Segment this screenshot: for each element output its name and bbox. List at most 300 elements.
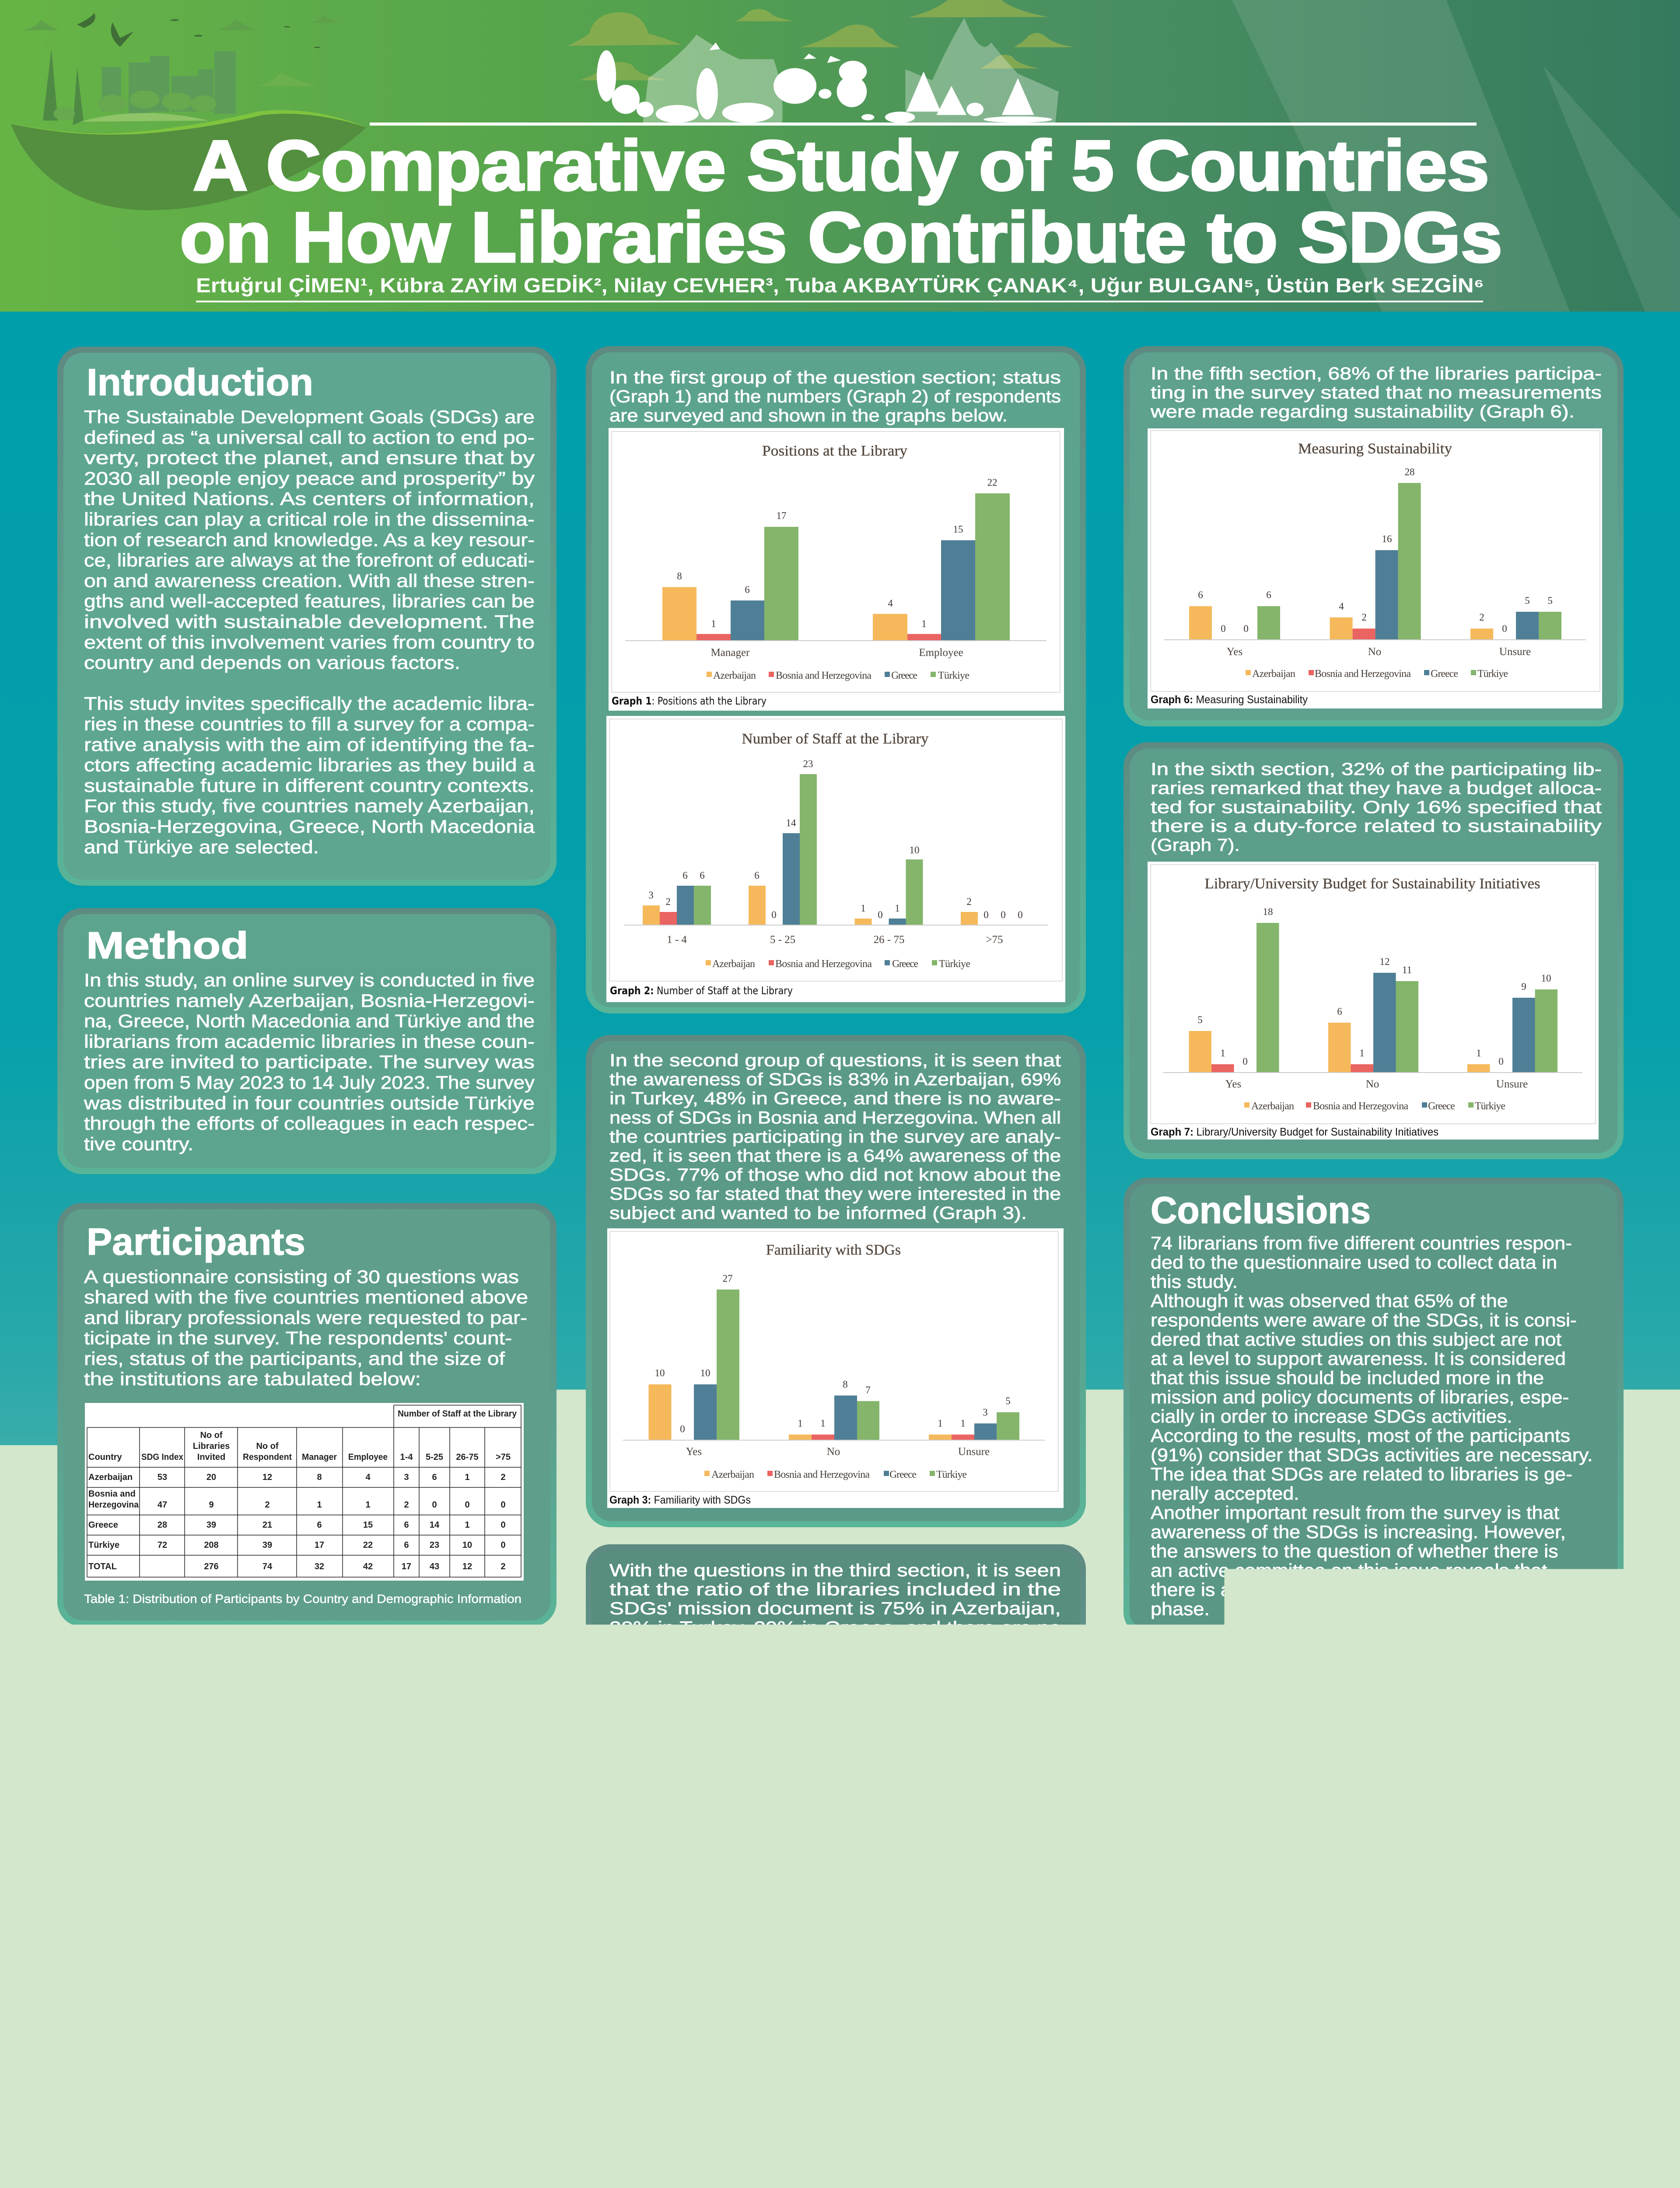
text: acknowledgement body: from Greece, Elchin Mamadov from Azerbaijan, bbox=[1151, 2086, 1568, 2107]
value labels 2 bbox=[648, 758, 1023, 920]
header band bbox=[0, 0, 1680, 312]
title: on How Libraries Contribute to SDGs bbox=[180, 198, 1502, 277]
text: method body: na, Greece, North Macedonia and Türkiye and the bbox=[84, 1011, 535, 1031]
text: limitations body bbox=[84, 1712, 535, 1999]
table 1: >75 bbox=[496, 1452, 511, 1462]
text: limitations body: The acceptance of the fact that academic libraries bbox=[84, 1712, 535, 1732]
table 1: 39 bbox=[206, 1520, 216, 1530]
value labels 4: 9 bbox=[844, 1897, 849, 1908]
categories 7: No bbox=[1366, 1078, 1379, 1090]
text: fifth section: In the fifth section, 68% of the libraries participa- bbox=[1151, 364, 1602, 383]
text: fifth section bbox=[1150, 364, 1602, 421]
table 1: 0 bbox=[500, 1500, 506, 1510]
chart: graph 3 familiarity with SDGs bbox=[607, 1228, 1064, 1508]
text: third section: 38% in Turkey, 29% in Greece, and there are no bbox=[609, 1618, 1061, 1637]
value labels 7: 1 bbox=[1220, 1048, 1225, 1059]
categories 4: Yes bbox=[686, 1995, 702, 2007]
table 1: 47 bbox=[158, 1500, 167, 1510]
caption 3: Graph 3: Familiarity with SDGs bbox=[609, 1494, 751, 1506]
text: first group: are surveyed and shown in the graphs below. bbox=[609, 406, 1008, 425]
text: third section: that the rate of libraries included in the SDGs' bbox=[609, 1694, 1061, 1714]
text: third section: included in library policies is 43% (Graph 4). bbox=[609, 1752, 1015, 1771]
text: limitations body: can actively contribute to the sustainability ef- bbox=[84, 1732, 535, 1753]
text: introduction body: rative analysis with the aim of identifying the fa- bbox=[84, 734, 535, 755]
table 1: 32 bbox=[315, 1562, 324, 1571]
table 1: Türkiye bbox=[88, 1540, 119, 1550]
text: conclusions body: an active committee on this issue reveals that bbox=[1151, 1560, 1547, 1581]
value labels 6: 4 bbox=[1339, 601, 1344, 612]
text: recommendations body bbox=[1151, 1725, 1592, 1967]
chart title 4: Statement bbox=[802, 1807, 867, 1823]
text: limitations body: constitutes a primary limitation for the study as a bbox=[84, 1794, 535, 1814]
categories 2: >75 bbox=[986, 934, 1003, 946]
text: conclusions body: cially in order to increase SDGs activities. bbox=[1151, 1406, 1512, 1427]
text: acknowledgement body: Ejla Curovac and Nadina Grebovic-Lendo from bbox=[1151, 2106, 1562, 2126]
text: introduction body: verty, protect the planet, and ensure that by bbox=[84, 448, 535, 468]
value labels 2: 6 bbox=[700, 870, 705, 881]
legend 3: Türkiye bbox=[936, 1469, 967, 1480]
text: conclusions body: (91%) consider that SDGs activities are necessary. bbox=[1151, 1445, 1592, 1466]
text: limitations body: survey should be announced wider and through bbox=[84, 1937, 535, 1958]
caption 6: Graph 6: Measuring Sustainability bbox=[1151, 694, 1308, 706]
value labels 7: 5 bbox=[1197, 1014, 1203, 1025]
text: recommendations body: certain level of awareness about the SDGs in all bbox=[1151, 1745, 1569, 1765]
value labels 2: 1 bbox=[861, 903, 866, 914]
table 1: SDG Index bbox=[141, 1452, 183, 1462]
legend 7: Türkiye bbox=[1475, 1101, 1505, 1112]
text: results body: easy to understand, the section consisting of 30 bbox=[84, 2125, 535, 2146]
text: acknowledgement body: Bosnia-Herzegovina for helping the dispatching bbox=[1151, 2125, 1566, 2146]
text: sixth section: In the sixth section, 32% of the participating lib- bbox=[1151, 760, 1602, 779]
text: conclusions body: ded to the questionnaire used to collect data in bbox=[1151, 1252, 1557, 1273]
text: third section: that the ratio of the libraries included in the bbox=[609, 1580, 1061, 1599]
table 1: 43 bbox=[430, 1562, 439, 1571]
text: introduction body bbox=[84, 407, 535, 857]
bars 6 bbox=[1189, 483, 1561, 640]
table 1: Greece bbox=[88, 1520, 118, 1530]
panel: third section bbox=[586, 1544, 1086, 2078]
text: participants body: the institutions are tabulated below: bbox=[84, 1369, 421, 1389]
value labels 3: 1 bbox=[798, 1418, 803, 1429]
value labels 3: 0 bbox=[680, 1424, 685, 1434]
chart title 2: Number of Staff at the Library bbox=[742, 731, 928, 747]
categories 4: No bbox=[828, 1995, 841, 2007]
table 1: TOTAL bbox=[88, 1562, 117, 1571]
legend 7: Azerbaijan bbox=[1251, 1101, 1294, 1112]
text: recommendations body: lementation of SDGs, to ensure that SDGs are inc- bbox=[1151, 1886, 1592, 1906]
value labels 3: 5 bbox=[1005, 1396, 1011, 1406]
text: recommendations body: During this study, it was observed that there was a bbox=[1151, 1725, 1589, 1745]
value labels 3: 7 bbox=[865, 1385, 871, 1396]
heading: recommendations: Recommendations bbox=[1151, 1675, 1466, 1717]
text: acknowledgement body: The authors would like to thank Vasiliki Mole bbox=[1151, 2067, 1540, 2087]
chart: graph 6 measuring sustainability bbox=[1148, 428, 1602, 708]
text: conclusions body: mission and policy documents of libraries, espe- bbox=[1151, 1387, 1569, 1408]
legend 6: Azerbaijan bbox=[1252, 668, 1295, 680]
text: introduction body: ries in these countries to fill a survey for a compa- bbox=[84, 714, 535, 734]
value labels 3: 10 bbox=[700, 1368, 710, 1378]
legend 1: Greece bbox=[891, 670, 917, 681]
chart: graph 1 positions at the library bbox=[609, 428, 1064, 711]
table 1: 0 bbox=[432, 1500, 437, 1510]
table 1: 2 bbox=[404, 1500, 409, 1510]
table 1: 12 bbox=[462, 1562, 472, 1571]
text: introduction body: ce, libraries are always at the forefront of educati- bbox=[84, 550, 535, 571]
value labels 7: 18 bbox=[1263, 906, 1273, 917]
text: third section: and Herzegovina. Upon examining all of the bbox=[609, 1656, 1061, 1676]
text: sixth section: (Graph 7). bbox=[1151, 836, 1240, 855]
value labels 4: 2 bbox=[798, 1957, 804, 1967]
legend 2 bbox=[706, 958, 970, 970]
text: second group: the countries participating in the survey are analy- bbox=[609, 1127, 1061, 1147]
table 1: Azerbaijan bbox=[88, 1473, 133, 1482]
panel: first group bbox=[586, 346, 1086, 1013]
legend 3: Greece bbox=[889, 1469, 917, 1480]
value labels 1: 4 bbox=[888, 598, 893, 609]
text: acknowledgement body: online survey respondents for their participation. bbox=[1151, 2164, 1573, 2184]
categories 3: Unsure bbox=[958, 1446, 990, 1458]
value labels 4 bbox=[657, 1830, 1013, 1984]
text: second group bbox=[609, 1051, 1061, 1223]
value labels 2: 23 bbox=[803, 758, 813, 769]
table 1: 2 bbox=[265, 1500, 270, 1510]
value labels 2: 1 bbox=[895, 903, 900, 914]
panel: conclusions bbox=[1124, 1178, 1624, 1637]
text: introduction body: This study invites specifically the academic libra- bbox=[84, 693, 535, 714]
legend 4: Greece bbox=[891, 2018, 918, 2030]
chart title 7: Library/University Budget for Sustainability Initiatives bbox=[1205, 876, 1540, 892]
legend 7: Bosnia and Herzegovina bbox=[1313, 1101, 1408, 1112]
text: recommendations body: the implementation level of sustainability at lib- bbox=[1151, 1805, 1556, 1826]
table 1: 14 bbox=[430, 1520, 440, 1530]
text: limitations body: cantly at national and institutional level. This bbox=[84, 1773, 535, 1794]
value labels 1 bbox=[677, 477, 998, 629]
text: participants body: ticipate in the survey. The respondents' count- bbox=[84, 1328, 512, 1348]
legend 3: Bosnia and Herzegovina bbox=[774, 1469, 870, 1480]
table 1: 1 bbox=[465, 1473, 470, 1482]
text: method body bbox=[84, 970, 535, 1154]
text: second group: zed, it is seen that there is a 64% awareness of the bbox=[609, 1147, 1061, 1166]
value labels 7: 0 bbox=[1242, 1056, 1248, 1067]
text: sixth section: raries remarked that they have a budget alloca- bbox=[1151, 778, 1602, 798]
text: fourth section: training in your institution?" stated that such trai- bbox=[609, 2155, 1061, 2174]
chart title 3: Familiarity with SDGs bbox=[766, 1242, 901, 1258]
value labels 6: 2 bbox=[1479, 612, 1484, 623]
value labels 4: 1 bbox=[939, 1965, 945, 1976]
legend 4: Azerbaijan bbox=[712, 2018, 755, 2030]
lower background hills bbox=[0, 1532, 1680, 2188]
legend 4: Türkiye bbox=[938, 2018, 969, 2030]
text: third section: that the rate of institutions stating that SDGs are bbox=[609, 1732, 1061, 1752]
text: introduction body: involved with sustainable development. The bbox=[84, 611, 535, 632]
panel: results bbox=[57, 2038, 556, 2188]
text: recommendations body: used more regularly in order to increase the imp- bbox=[1151, 1865, 1575, 1886]
value labels 4: 17 bbox=[864, 1830, 874, 1841]
text: introduction body: sustainable future in different country contexts. bbox=[84, 775, 535, 796]
categories 7: Yes bbox=[1225, 1078, 1241, 1090]
text: conclusions body: phase. bbox=[1151, 1599, 1210, 1620]
legend 2: Türkiye bbox=[939, 958, 970, 970]
legend 6: Bosnia and Herzegovina bbox=[1315, 668, 1411, 680]
text: conclusions body: there is an important deficiency in the action bbox=[1151, 1580, 1534, 1600]
chart title 6: Measuring Sustainability bbox=[1298, 441, 1452, 457]
value labels 2: 3 bbox=[648, 890, 654, 901]
table 1: 2 bbox=[500, 1562, 506, 1571]
text: conclusions body: at a level to support awareness. It is considered bbox=[1151, 1349, 1566, 1369]
text: acknowledgement body: of the survey in the respective countries and the bbox=[1151, 2145, 1572, 2165]
text: second group: SDGs. 77% of those who did not know about the bbox=[609, 1165, 1061, 1185]
text: introduction body: 2030 all people enjoy peace and prosperity” by bbox=[84, 468, 535, 488]
text: second group: In the second group of questions, it is seen that bbox=[609, 1051, 1061, 1070]
legend 2: Greece bbox=[892, 958, 918, 970]
text: recommendations body: of the 4 countries surveyed. However, this study bbox=[1151, 1765, 1568, 1785]
table 1: Libraries bbox=[193, 1441, 230, 1451]
legend 1: Türkiye bbox=[938, 670, 970, 681]
text: first group bbox=[609, 368, 1061, 425]
text: third section: With the questions in the third section, it is seen bbox=[609, 1561, 1061, 1580]
value labels 6: 0 bbox=[1502, 623, 1507, 634]
text: introduction body: country and depends on various factors. bbox=[84, 652, 460, 673]
authors: Ertuğrul ÇİMEN¹, Kübra ZAYİM GEDİK², Nilay CEVHER³, Tuba AKBAYTÜRK ÇANAK⁴, Uğur BULGAN⁵, Üstün Berk SEZGİN⁶ bbox=[196, 274, 1484, 297]
categories 3 bbox=[686, 1446, 990, 1458]
table 1: 42 bbox=[363, 1562, 373, 1571]
table 1: 1 bbox=[465, 1520, 470, 1530]
panel: recommendations bbox=[1124, 1659, 1624, 1988]
table 1: 1 bbox=[317, 1500, 322, 1510]
table 1: 276 bbox=[204, 1562, 219, 1571]
legend 4: Bosnia and Herzegovina bbox=[774, 2018, 871, 2030]
text: recommendations body: raries. It is recommended that IFLA Library Map bbox=[1151, 1825, 1566, 1846]
text: conclusions body: that this issue should be included more in the bbox=[1151, 1368, 1544, 1389]
heading: method: Method bbox=[86, 925, 248, 967]
header left city illustration bbox=[10, 13, 367, 210]
text: fifth section: ting in the survey stated that no measurements bbox=[1151, 383, 1602, 402]
heading: participants: Participants bbox=[87, 1221, 305, 1263]
text: conclusions body bbox=[1151, 1233, 1592, 1620]
text: recommendations body: to make all these studies visible in all countries bbox=[1151, 1926, 1558, 1946]
categories 4 bbox=[686, 1995, 991, 2007]
value labels 6: 0 bbox=[1243, 623, 1249, 634]
text: participants body: and library professionals were requested to par- bbox=[84, 1307, 527, 1328]
text: limitations body: the number of participants from other four bbox=[84, 1896, 535, 1917]
panel: sixth section bbox=[1124, 742, 1624, 1159]
chart: graph 4 inclusion in mission statement bbox=[607, 1777, 1062, 2059]
value labels 7: 9 bbox=[1521, 981, 1526, 992]
categories 3: Yes bbox=[686, 1446, 702, 1458]
table 1: Manager bbox=[302, 1452, 337, 1462]
chart: graph 2 number of staff bbox=[606, 716, 1065, 1002]
chart: graph 7 budget for sustainability bbox=[1148, 862, 1599, 1140]
table 1: 74 bbox=[262, 1562, 273, 1571]
categories 2 bbox=[667, 934, 1003, 946]
table 1: 53 bbox=[158, 1473, 167, 1482]
text: participants body: A questionnaire consisting of 30 questions was bbox=[84, 1266, 519, 1287]
text: fourth section: answered the question "Is there sustainability bbox=[609, 2136, 1061, 2156]
value labels 6: 2 bbox=[1362, 612, 1367, 623]
bars 4 bbox=[648, 1847, 1022, 1990]
heading: limitations: Limitations bbox=[86, 1668, 292, 1710]
table 1: 0 bbox=[500, 1520, 506, 1530]
value labels 4: 0 bbox=[680, 1973, 685, 1984]
value labels 7 bbox=[1197, 906, 1551, 1067]
text: limitations body: alternative channels. Due to the pressing submis- bbox=[84, 1958, 535, 1978]
table 1: Employee bbox=[348, 1452, 388, 1462]
value labels 4: 6 bbox=[703, 1923, 708, 1934]
legend 6 bbox=[1246, 668, 1508, 680]
value labels 7: 11 bbox=[1402, 964, 1412, 975]
text: third section: mission document is 41%. It has been observed bbox=[609, 1714, 1061, 1733]
value labels 7: 1 bbox=[1359, 1048, 1365, 1059]
value labels 3: 1 bbox=[960, 1418, 966, 1429]
categories 1: Employee bbox=[919, 647, 963, 659]
table 1: No of bbox=[256, 1441, 279, 1451]
heading: conclusions: Conclusions bbox=[1151, 1189, 1371, 1231]
value labels 1: 17 bbox=[776, 510, 787, 521]
categories 2: 1 - 4 bbox=[667, 934, 687, 946]
value labels 7: 1 bbox=[1476, 1048, 1481, 1059]
table 1: 9 bbox=[209, 1500, 214, 1510]
text: introduction body: extent of this involvement varies from country to bbox=[84, 632, 535, 652]
value labels 2: 6 bbox=[682, 870, 688, 881]
text: sixth section bbox=[1151, 760, 1602, 855]
legend 6: Greece bbox=[1431, 668, 1458, 680]
value labels 6: 5 bbox=[1547, 595, 1553, 606]
text: third section: libraries in the SDGs' mission statement in Bosnia bbox=[609, 1637, 1061, 1656]
value labels 3: 8 bbox=[843, 1379, 848, 1390]
text: conclusions body: respondents were aware of the SDGs, it is consi- bbox=[1151, 1310, 1577, 1331]
table 1: 6 bbox=[317, 1520, 322, 1530]
value labels 2: 10 bbox=[909, 845, 920, 856]
heading: introduction: Introduction bbox=[87, 361, 313, 403]
text: limitations body: sion deadline, more time could not be given. bbox=[84, 1978, 500, 1999]
text: method body: tive country. bbox=[84, 1133, 193, 1154]
table 1 bbox=[85, 1403, 524, 1581]
value labels 6: 6 bbox=[1198, 589, 1203, 600]
caption 1: Graph 1: Positions ath the Library bbox=[612, 695, 766, 707]
legend 2: Azerbaijan bbox=[712, 958, 755, 970]
value labels 1: 6 bbox=[745, 584, 750, 595]
categories 1: Manager bbox=[711, 647, 750, 659]
value labels 3: 1 bbox=[820, 1418, 826, 1429]
text: conclusions body: Another important result from the survey is that bbox=[1151, 1503, 1559, 1523]
panel: introduction bbox=[57, 347, 556, 886]
text: participants body: shared with the five countries mentioned above bbox=[84, 1287, 528, 1308]
text: method body: In this study, an online survey is conducted in five bbox=[84, 970, 535, 990]
legend 1: Azerbaijan bbox=[713, 670, 756, 681]
table 1: 17 bbox=[315, 1540, 324, 1550]
value labels 1: 1 bbox=[711, 618, 716, 629]
table 1: Respondent bbox=[243, 1452, 292, 1462]
panel: acknowledgement bbox=[1124, 2011, 1624, 2188]
table 1: 2 bbox=[500, 1473, 506, 1482]
legend 3: Azerbaijan bbox=[711, 1469, 754, 1480]
panel: limitations bbox=[57, 1651, 556, 2015]
text: introduction body: tion of research and knowledge. As a key resour- bbox=[84, 529, 535, 550]
text: sixth section: there is a duty-force related to sustainability bbox=[1151, 817, 1602, 836]
legend 1 bbox=[707, 670, 970, 681]
text: conclusions body: nerally accepted. bbox=[1151, 1483, 1299, 1504]
value labels 3 bbox=[654, 1273, 1011, 1434]
text: method body: countries namely Azerbaijan, Bosnia-Herzegovi- bbox=[84, 990, 535, 1011]
table 1: 0 bbox=[500, 1540, 506, 1550]
heading: acknowledgement: Acknowledgement bbox=[1151, 2027, 1502, 2069]
value labels 7: 6 bbox=[1337, 1006, 1342, 1017]
chart title 4 bbox=[681, 1790, 988, 1823]
value labels 4: 1 bbox=[962, 1965, 967, 1976]
table 1: 12 bbox=[262, 1473, 272, 1482]
panel: fifth section bbox=[1124, 346, 1624, 726]
caption 2: Graph 2: Number of Staff at the Library bbox=[610, 985, 793, 997]
legend 2: Bosnia and Herzegovina bbox=[775, 958, 872, 970]
value labels 1: 8 bbox=[677, 571, 682, 582]
caption 4: Graph 4: Inclusion of Sustainability in the Library’s Mission Statement bbox=[609, 2044, 932, 2056]
panel: method bbox=[57, 908, 556, 1174]
table 1: 26-75 bbox=[456, 1452, 479, 1462]
table 1: Invited bbox=[197, 1452, 225, 1462]
panel: fourth section bbox=[586, 2095, 1086, 2188]
table 1: 39 bbox=[262, 1540, 272, 1550]
text: first group: In the first group of the question section; status bbox=[609, 368, 1061, 387]
text: second group: the awareness of SDGs is 83% in Azerbaijan, 69% bbox=[609, 1070, 1061, 1089]
caption 7: Graph 7: Library/University Budget for Sustainability Initiatives bbox=[1151, 1126, 1438, 1138]
table 1: 21 bbox=[262, 1520, 272, 1530]
table 1: 4 bbox=[365, 1473, 371, 1482]
table 1: Number of Staff at the Library bbox=[398, 1409, 517, 1419]
table 1: 6 bbox=[432, 1473, 437, 1482]
table 1: 3 bbox=[404, 1473, 409, 1482]
text: limitations body: forts in their parent institutions may vary signifi- bbox=[84, 1753, 535, 1774]
table 1: Herzegovina bbox=[88, 1500, 139, 1510]
text: introduction body: For this study, five countries namely Azerbaijan, bbox=[84, 796, 535, 816]
text: limitations body: No response has been received from North Mace- bbox=[84, 1855, 535, 1876]
text: second group: ness of SDGs in Bosnia and Herzegovina. When all bbox=[609, 1108, 1061, 1127]
table 1: 8 bbox=[317, 1473, 322, 1482]
text: introduction body: ctors affecting academic libraries as they build a bbox=[84, 755, 535, 775]
categories 1 bbox=[711, 647, 963, 659]
table 1: 5-25 bbox=[426, 1452, 443, 1462]
chart title 4: Inclusion of Sustainability in the Library's Misson bbox=[681, 1790, 988, 1806]
value labels 6 bbox=[1198, 466, 1553, 634]
text: participants body bbox=[84, 1266, 528, 1389]
value labels 6: 28 bbox=[1404, 466, 1415, 477]
text: introduction body: gths and well-accepted features, libraries can be bbox=[84, 591, 535, 611]
value labels 4: 9 bbox=[657, 1897, 662, 1908]
text: second group: SDGs so far stated that they were interested in the bbox=[609, 1185, 1061, 1204]
table 1: 1-4 bbox=[400, 1452, 413, 1462]
bars 2 bbox=[643, 774, 978, 925]
categories 3: No bbox=[827, 1446, 840, 1458]
table 1: Country bbox=[88, 1452, 122, 1462]
text: third section: countries participating in the survey, it is seen bbox=[609, 1676, 1061, 1695]
table 1: 208 bbox=[204, 1540, 219, 1550]
table 1: 23 bbox=[430, 1540, 439, 1550]
text: method body: open from 5 May 2023 to 14 July 2023. The survey bbox=[84, 1072, 535, 1093]
text: limitations body: factor affecting the return rate. bbox=[84, 1814, 355, 1835]
table 1: 10 bbox=[462, 1540, 472, 1550]
text: introduction body: libraries can play a critical role in the dissemina- bbox=[84, 509, 535, 529]
text: conclusions body: According to the results, most of the participants bbox=[1151, 1426, 1570, 1446]
text: limitations body: countries was low. To receive more feedback, the bbox=[84, 1917, 535, 1937]
header rules bbox=[196, 123, 1483, 302]
value labels 6: 16 bbox=[1382, 533, 1392, 544]
table 1: 20 bbox=[206, 1473, 216, 1482]
text: introduction body: The Sustainable Development Goals (SDGs) are bbox=[84, 407, 535, 427]
value labels 4: 7 bbox=[1008, 1914, 1013, 1925]
table 1: 72 bbox=[158, 1540, 167, 1550]
value labels 3: 1 bbox=[938, 1418, 943, 1429]
value labels 2: 0 bbox=[1018, 909, 1023, 920]
text: conclusions body: The idea that SDGs are related to libraries is ge- bbox=[1151, 1464, 1572, 1485]
